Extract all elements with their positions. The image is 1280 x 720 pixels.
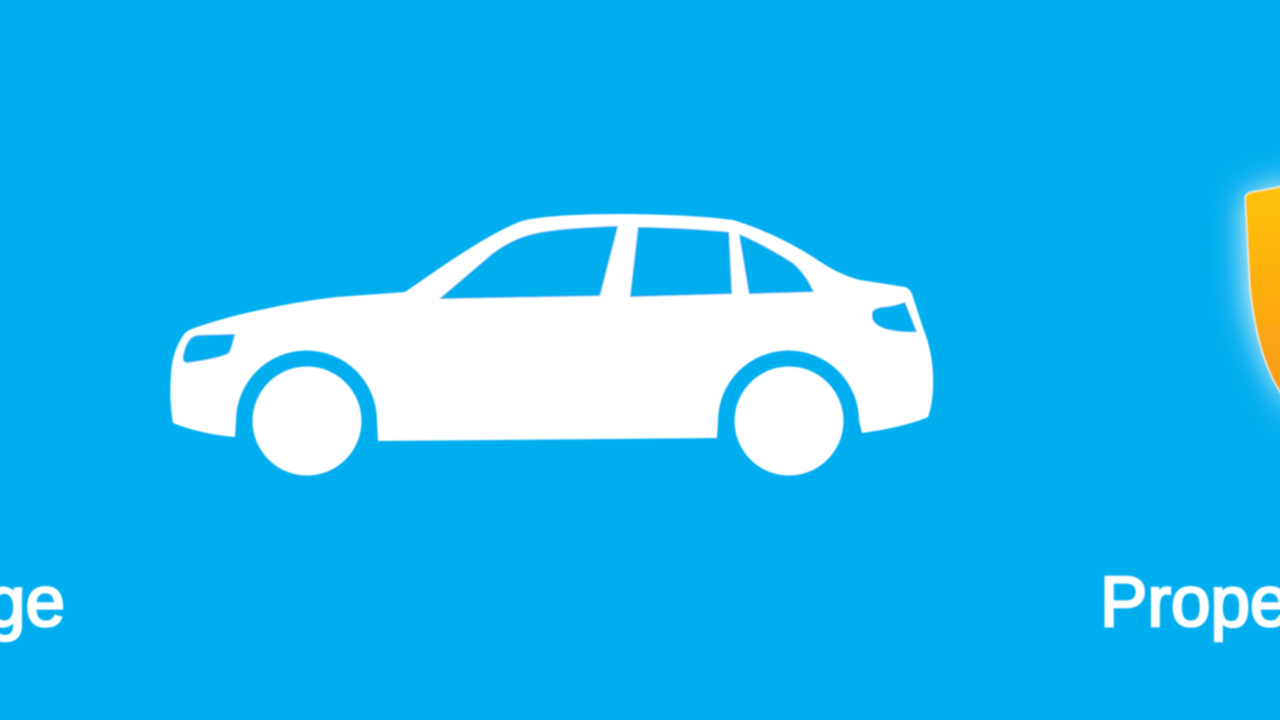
middle window xyxy=(630,227,732,297)
front window xyxy=(439,226,618,299)
icon: car xyxy=(170,214,933,476)
icon: shield xyxy=(1245,186,1280,395)
headlight xyxy=(183,334,235,363)
car body xyxy=(170,214,933,441)
shield glow xyxy=(1244,180,1280,420)
rear wheel xyxy=(734,366,844,476)
rear window xyxy=(739,234,814,294)
front wheel xyxy=(252,366,362,476)
taillight xyxy=(872,302,917,332)
